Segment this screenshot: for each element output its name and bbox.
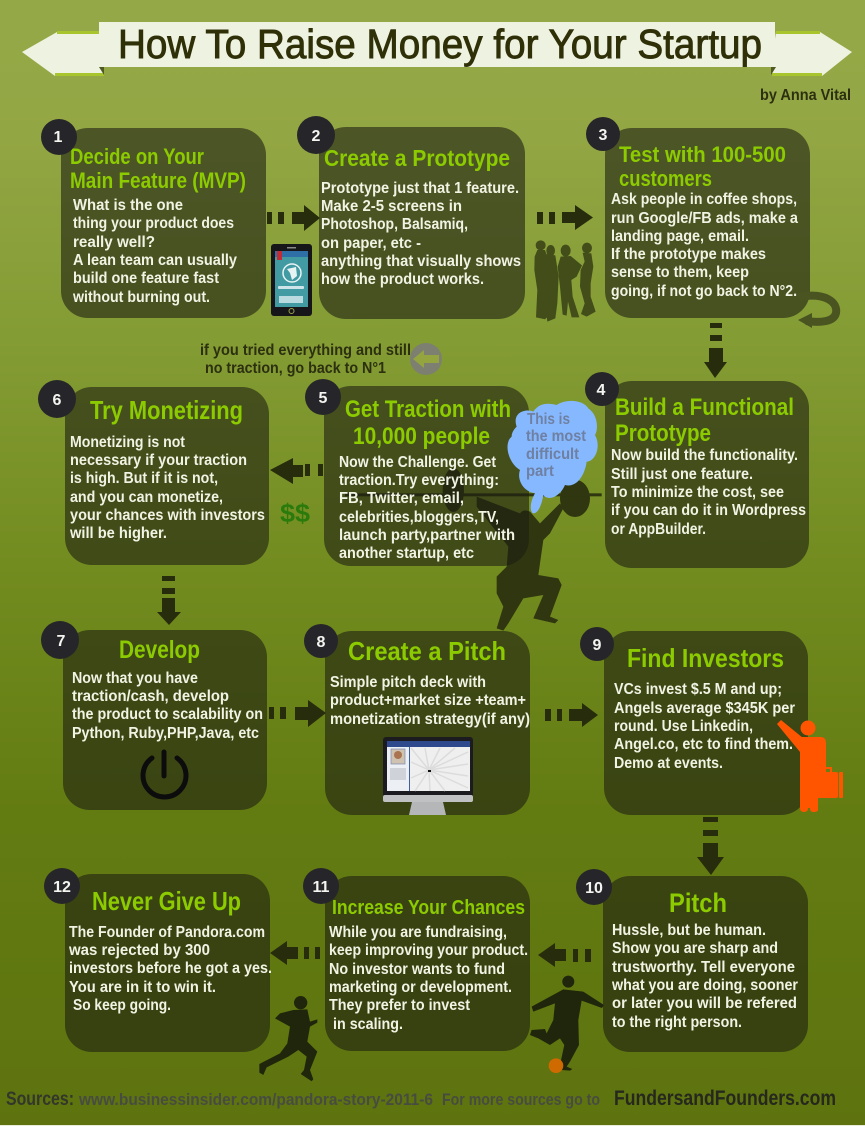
panel 10: pitch [603, 876, 808, 1052]
panel 6: try monetizing: and you can monetize, [70, 489, 223, 506]
step number 5: 5 [319, 390, 328, 407]
curved return arrow to step 2 [798, 296, 836, 328]
step number 4 [585, 372, 619, 406]
callout: most difficult part: This is [527, 411, 570, 428]
step number 1: 1 [54, 129, 63, 146]
panel 4: functional prototype: To minimize the cost, see [611, 484, 784, 501]
footer sources [6, 1087, 836, 1110]
arrow 6 to 7 [157, 576, 181, 625]
panel 11: increase your chances: in scaling. [333, 1016, 403, 1033]
note: go back to step 1 [200, 342, 411, 377]
panel 2: create a prototype: how the product works. [321, 271, 484, 288]
panel 11: increase your chances: No investor wants to fund [329, 961, 505, 978]
panel 10: pitch: trustworthy. Tell everyone [612, 959, 795, 976]
step number 7 [41, 621, 79, 659]
panel 2: create a prototype: anything that visually shows [321, 253, 521, 270]
panel 7: develop: the product to scalability on [72, 706, 263, 723]
arrow 11 to 12 [270, 941, 320, 965]
panel 5: get traction: 10,000 people [353, 423, 490, 450]
panel 7: develop [63, 630, 267, 810]
panel 1: decide on main feature: Main Feature (MVP) [70, 168, 246, 193]
panel 3: test with customers: landing page, email. [611, 228, 749, 245]
panel 9: find investors: Angel.co, etc to find them. [614, 736, 793, 753]
arrow 3 to 4 [704, 323, 727, 378]
arrow 5 to 6 [270, 458, 323, 484]
step number 10: 10 [585, 880, 603, 897]
panel 6: try monetizing: is high. But if it is not, [70, 470, 218, 487]
step number 6 [38, 380, 76, 418]
panel 10: pitch: Pitch [669, 888, 727, 918]
panel 3: test with customers: customers [619, 166, 712, 191]
callout: most difficult part: the most [526, 428, 587, 445]
step number 10 [576, 869, 612, 905]
title ribbon [22, 21, 852, 76]
panel 4: functional prototype: Prototype [615, 420, 711, 447]
panel 5: get traction: FB, Twitter, email, [339, 490, 464, 507]
panel 12: never give up: The Founder of Pandora.com [69, 924, 265, 941]
panel 1: decide on main feature: A lean team can usually [73, 252, 237, 269]
panel 11: increase your chances: They prefer to invest [329, 997, 471, 1014]
step number 11: 11 [313, 879, 330, 896]
icon: power button [143, 752, 186, 797]
panel 1: decide on main feature: What is the one [73, 197, 183, 214]
panel 4: functional prototype: Now build the functionality. [611, 447, 798, 464]
panel 3: test with customers: going, if not go back to N°2. [611, 283, 797, 300]
byline: by Anna Vital [760, 87, 851, 104]
icon: orange traveller with suitcase [777, 720, 843, 812]
panel 1: decide on main feature: build one feature fast [73, 270, 220, 287]
step number 4: 4 [597, 382, 606, 399]
footer sources: Sources: [6, 1089, 74, 1110]
panel 12: never give up: investors before he got a yes. [69, 960, 272, 977]
panel 8: create a pitch: monetization strategy(if any) [330, 711, 530, 728]
panel 3: test with customers: run Google/FB ads, make a [611, 210, 798, 227]
arrow 7 to 8 [269, 700, 326, 727]
panel 9: find investors: round. Use Linkedin, [614, 718, 753, 735]
panel 11: increase your chances [325, 876, 530, 1051]
step number 12: 12 [53, 879, 71, 896]
panel 1: decide on main feature: thing your product does [73, 215, 234, 232]
panel 9: find investors: Angels average $345K per [614, 700, 795, 717]
panel 6: try monetizing: Try Monetizing [90, 395, 243, 425]
callout: most difficult part: part [526, 463, 555, 480]
panel 11: increase your chances: keep improving your product. [329, 942, 528, 959]
panel 3: test with customers: Ask people in coffee shops, [611, 191, 797, 208]
step number 5 [305, 379, 341, 415]
panel 3: test with customers: Test with 100-500 [619, 142, 786, 167]
panel 8: create a pitch: Simple pitch deck with [330, 674, 486, 691]
panel 12: never give up [65, 874, 272, 1052]
icon: monitor with pitch deck [383, 737, 473, 815]
arrow 2 to 3 [537, 205, 593, 230]
panel 8: create a pitch: Create a Pitch [348, 636, 506, 666]
panel 2: create a prototype: Prototype just that 1 feature. [321, 180, 519, 197]
step number 3: 3 [599, 127, 608, 144]
step number 2: 2 [312, 128, 321, 145]
step number 8: 8 [317, 634, 326, 651]
panel 4: functional prototype: if you can do it in Wordpress [611, 502, 806, 519]
panel 8: create a pitch [325, 631, 530, 815]
panel 5: get traction: traction.Try everything: [339, 472, 499, 489]
panel 4: functional prototype [605, 381, 809, 568]
panel 7: develop: traction/cash, develop [72, 688, 229, 705]
step number 11 [303, 868, 339, 904]
panel 5: get traction [324, 386, 529, 566]
panel 11: increase your chances: While you are fundraising, [329, 924, 507, 941]
panel 6: try monetizing: will be higher. [69, 525, 167, 542]
panel 1: decide on main feature: without burning out. [72, 289, 210, 306]
note: go back to step 1: if you tried everything and still [200, 342, 411, 359]
icon: grey back arrow [410, 343, 442, 375]
panel 12: never give up: Never Give Up [92, 886, 241, 916]
panel 10: pitch: to the right person. [612, 1014, 742, 1031]
panel 6: try monetizing: Monetizing is not [70, 434, 186, 451]
panel 2: create a prototype [319, 127, 525, 319]
panel 10: pitch: Hussle, but be human. [612, 922, 766, 939]
footer sources: www.businessinsider.com/pandora-story-2011-6 [78, 1090, 433, 1109]
panel 11: increase your chances: Increase Your Chances [332, 897, 525, 919]
step number 9 [580, 627, 614, 661]
panel 5: get traction: celebrities,bloggers,TV, [339, 509, 499, 526]
panel 5: get traction: launch party,partner with [339, 527, 515, 544]
panel 1: decide on main feature [61, 128, 266, 318]
title: How To Raise Money for Your Startup [118, 21, 762, 67]
panel 7: develop: Now that you have [72, 670, 198, 687]
panel 10: pitch: Show you are sharp and [612, 940, 778, 957]
weightlifter silhouette [345, 468, 602, 631]
panel 2: create a prototype: Create a Prototype [324, 145, 510, 171]
icon: dollar signs: $$ [280, 498, 311, 528]
panel 3: test with customers [605, 128, 810, 318]
step number 8 [304, 624, 338, 658]
panel 6: try monetizing [65, 387, 269, 565]
panel 9: find investors: Find Investors [627, 643, 784, 673]
footer sources: For more sources go to [442, 1090, 600, 1109]
step number 7: 7 [57, 633, 66, 650]
arrow 8 to 9 [545, 703, 598, 727]
panel 7: develop: Develop [119, 636, 200, 664]
panel 11: increase your chances: marketing or development. [329, 979, 512, 996]
panel 2: create a prototype: Photoshop, Balsamiq, [321, 216, 468, 233]
panel 10: pitch: what you are doing, sooner [611, 977, 798, 994]
panel 5: get traction: another startup, etc [339, 545, 474, 562]
panel 10: pitch: or later you will be refered [612, 995, 797, 1012]
panel 1: decide on main feature: Decide on Your [70, 144, 204, 169]
icon: soccer player silhouette [530, 976, 604, 1073]
note: go back to step 1: no traction, go back to N°1 [205, 360, 386, 377]
arrow 10 to 11 [538, 943, 591, 967]
icon: group of people silhouettes [534, 240, 596, 322]
step number 3 [586, 117, 620, 151]
step number 6: 6 [53, 392, 62, 409]
panel 5: get traction: Get Traction with [345, 396, 511, 423]
panel 2: create a prototype: Make 2-5 screens in [321, 198, 462, 215]
callout: most difficult part [508, 401, 598, 513]
panel 12: never give up: You are in it to win it. [69, 979, 216, 996]
panel 8: create a pitch: product+market size +team+ [330, 692, 526, 709]
panel 9: find investors: Demo at events. [614, 755, 723, 772]
panel 9: find investors [604, 631, 808, 815]
arrow 1 to 2 [267, 205, 320, 231]
panel 1: decide on main feature: really well? [73, 234, 155, 251]
step number 12 [44, 868, 80, 904]
step number 1 [41, 119, 77, 155]
arrow 9 to 10 [697, 817, 724, 875]
panel 6: try monetizing: your chances with investors [70, 507, 265, 524]
callout: most difficult part: difficult [526, 446, 580, 463]
panel 3: test with customers: If the prototype makes [611, 246, 766, 263]
icon: runner silhouette [259, 996, 317, 1081]
panel 9: find investors: VCs invest $.5 M and up; [614, 681, 782, 698]
step number 2 [297, 116, 335, 154]
panel 2: create a prototype: on paper, etc - [321, 235, 421, 252]
panel 4: functional prototype: Still just one feature. [611, 466, 753, 483]
panel 3: test with customers: sense to them, keep [611, 264, 749, 281]
panel 5: get traction: Now the Challenge. Get [339, 454, 497, 471]
panel 7: develop: Python, Ruby,PHP,Java, etc [72, 725, 259, 742]
icon: smartphone [271, 244, 312, 316]
panel 12: never give up: was rejected by 300 [68, 942, 210, 959]
panel 4: functional prototype: or AppBuilder. [611, 521, 706, 538]
panel 6: try monetizing: necessary if your traction [70, 452, 247, 469]
step number 9: 9 [593, 637, 602, 654]
panel 12: never give up: So keep going. [73, 997, 171, 1014]
panel 4: functional prototype: Build a Functional [615, 394, 794, 421]
